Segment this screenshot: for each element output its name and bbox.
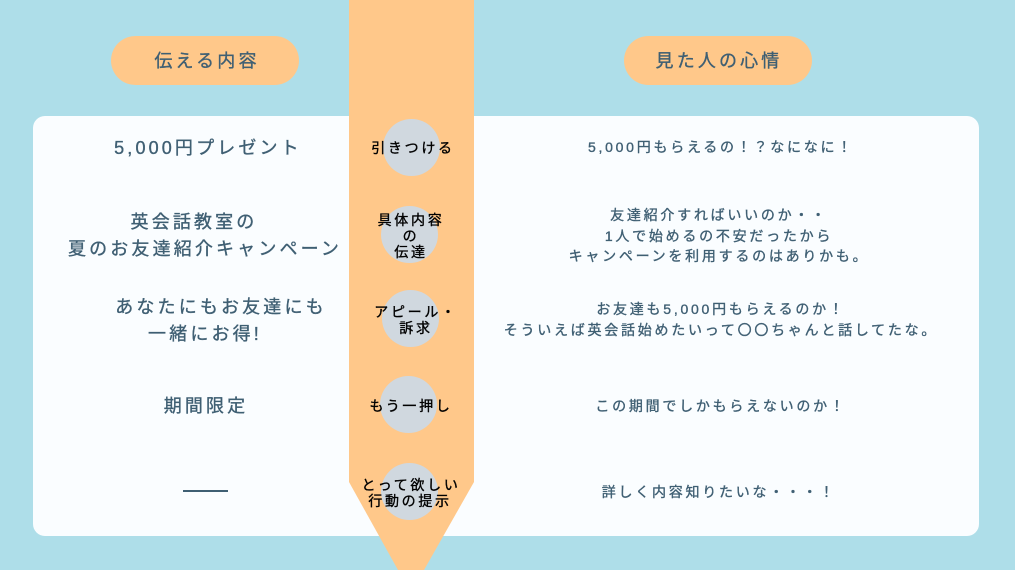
left text row 2: 夏のお友達紹介キャンペーン [68, 239, 342, 259]
left text row 4: 期間限定 [164, 396, 248, 416]
step label 2: の [403, 228, 419, 244]
step label 3: アピール・ [374, 304, 458, 320]
right text row 2 [569, 207, 869, 264]
heading pill: content to convey [111, 36, 299, 85]
left text row 3: あなたにもお友達にも [115, 297, 327, 317]
step circle 5 [381, 463, 438, 520]
step label 5 [361, 477, 461, 509]
right text row 3: そういえば英会話始めたいって〇〇ちゃんと話してたな。 [504, 322, 938, 338]
step label 3 [374, 304, 458, 336]
step label 5: とって欲しい [361, 477, 461, 493]
right text row 2: キャンペーンを利用するのはありかも。 [569, 248, 869, 264]
heading: viewer feelings: 見た人の心情 [656, 51, 782, 71]
right text row 4: この期間でしかもらえないのか！ [595, 398, 847, 414]
white panel [33, 116, 979, 536]
left text row 2: 英会話教室の [131, 212, 257, 232]
center orange arrow [349, 0, 474, 570]
step label 2: 伝達 [394, 244, 428, 260]
step label 4: もう一押し [369, 398, 453, 414]
right text row 3 [504, 301, 938, 338]
step circle 4 [380, 376, 437, 433]
heading pill: viewer feelings [624, 36, 812, 85]
left text row 5 dash [183, 490, 228, 492]
step label 2 [378, 212, 444, 260]
step label 5: 行動の提示 [368, 493, 452, 509]
left text row 3 [115, 297, 327, 344]
right text row 3: お友達も5,000円もらえるのか！ [596, 301, 846, 317]
right text row 1: 5,000円もらえるの！？なになに！ [588, 139, 854, 155]
heading: content to convey: 伝える内容 [154, 51, 260, 71]
right text row 5: 詳しく内容知りたいな・・・！ [602, 484, 836, 500]
step circle 1 [383, 119, 440, 176]
step label 3: 訴求 [399, 320, 433, 336]
step label 2: 具体内容 [378, 212, 444, 228]
left text row 2 [68, 212, 342, 259]
right text row 2: 1人で始めるの不安だったから [605, 228, 833, 244]
step circle 2 [381, 206, 438, 263]
step label 1: 引きつける [371, 140, 455, 156]
step circle 3 [382, 290, 439, 347]
left text row 1: 5,000円プレゼント [114, 138, 302, 158]
right text row 2: 友達紹介すればいいのか・・ [610, 207, 828, 223]
left text row 3: 一緒にお得! [148, 324, 262, 344]
